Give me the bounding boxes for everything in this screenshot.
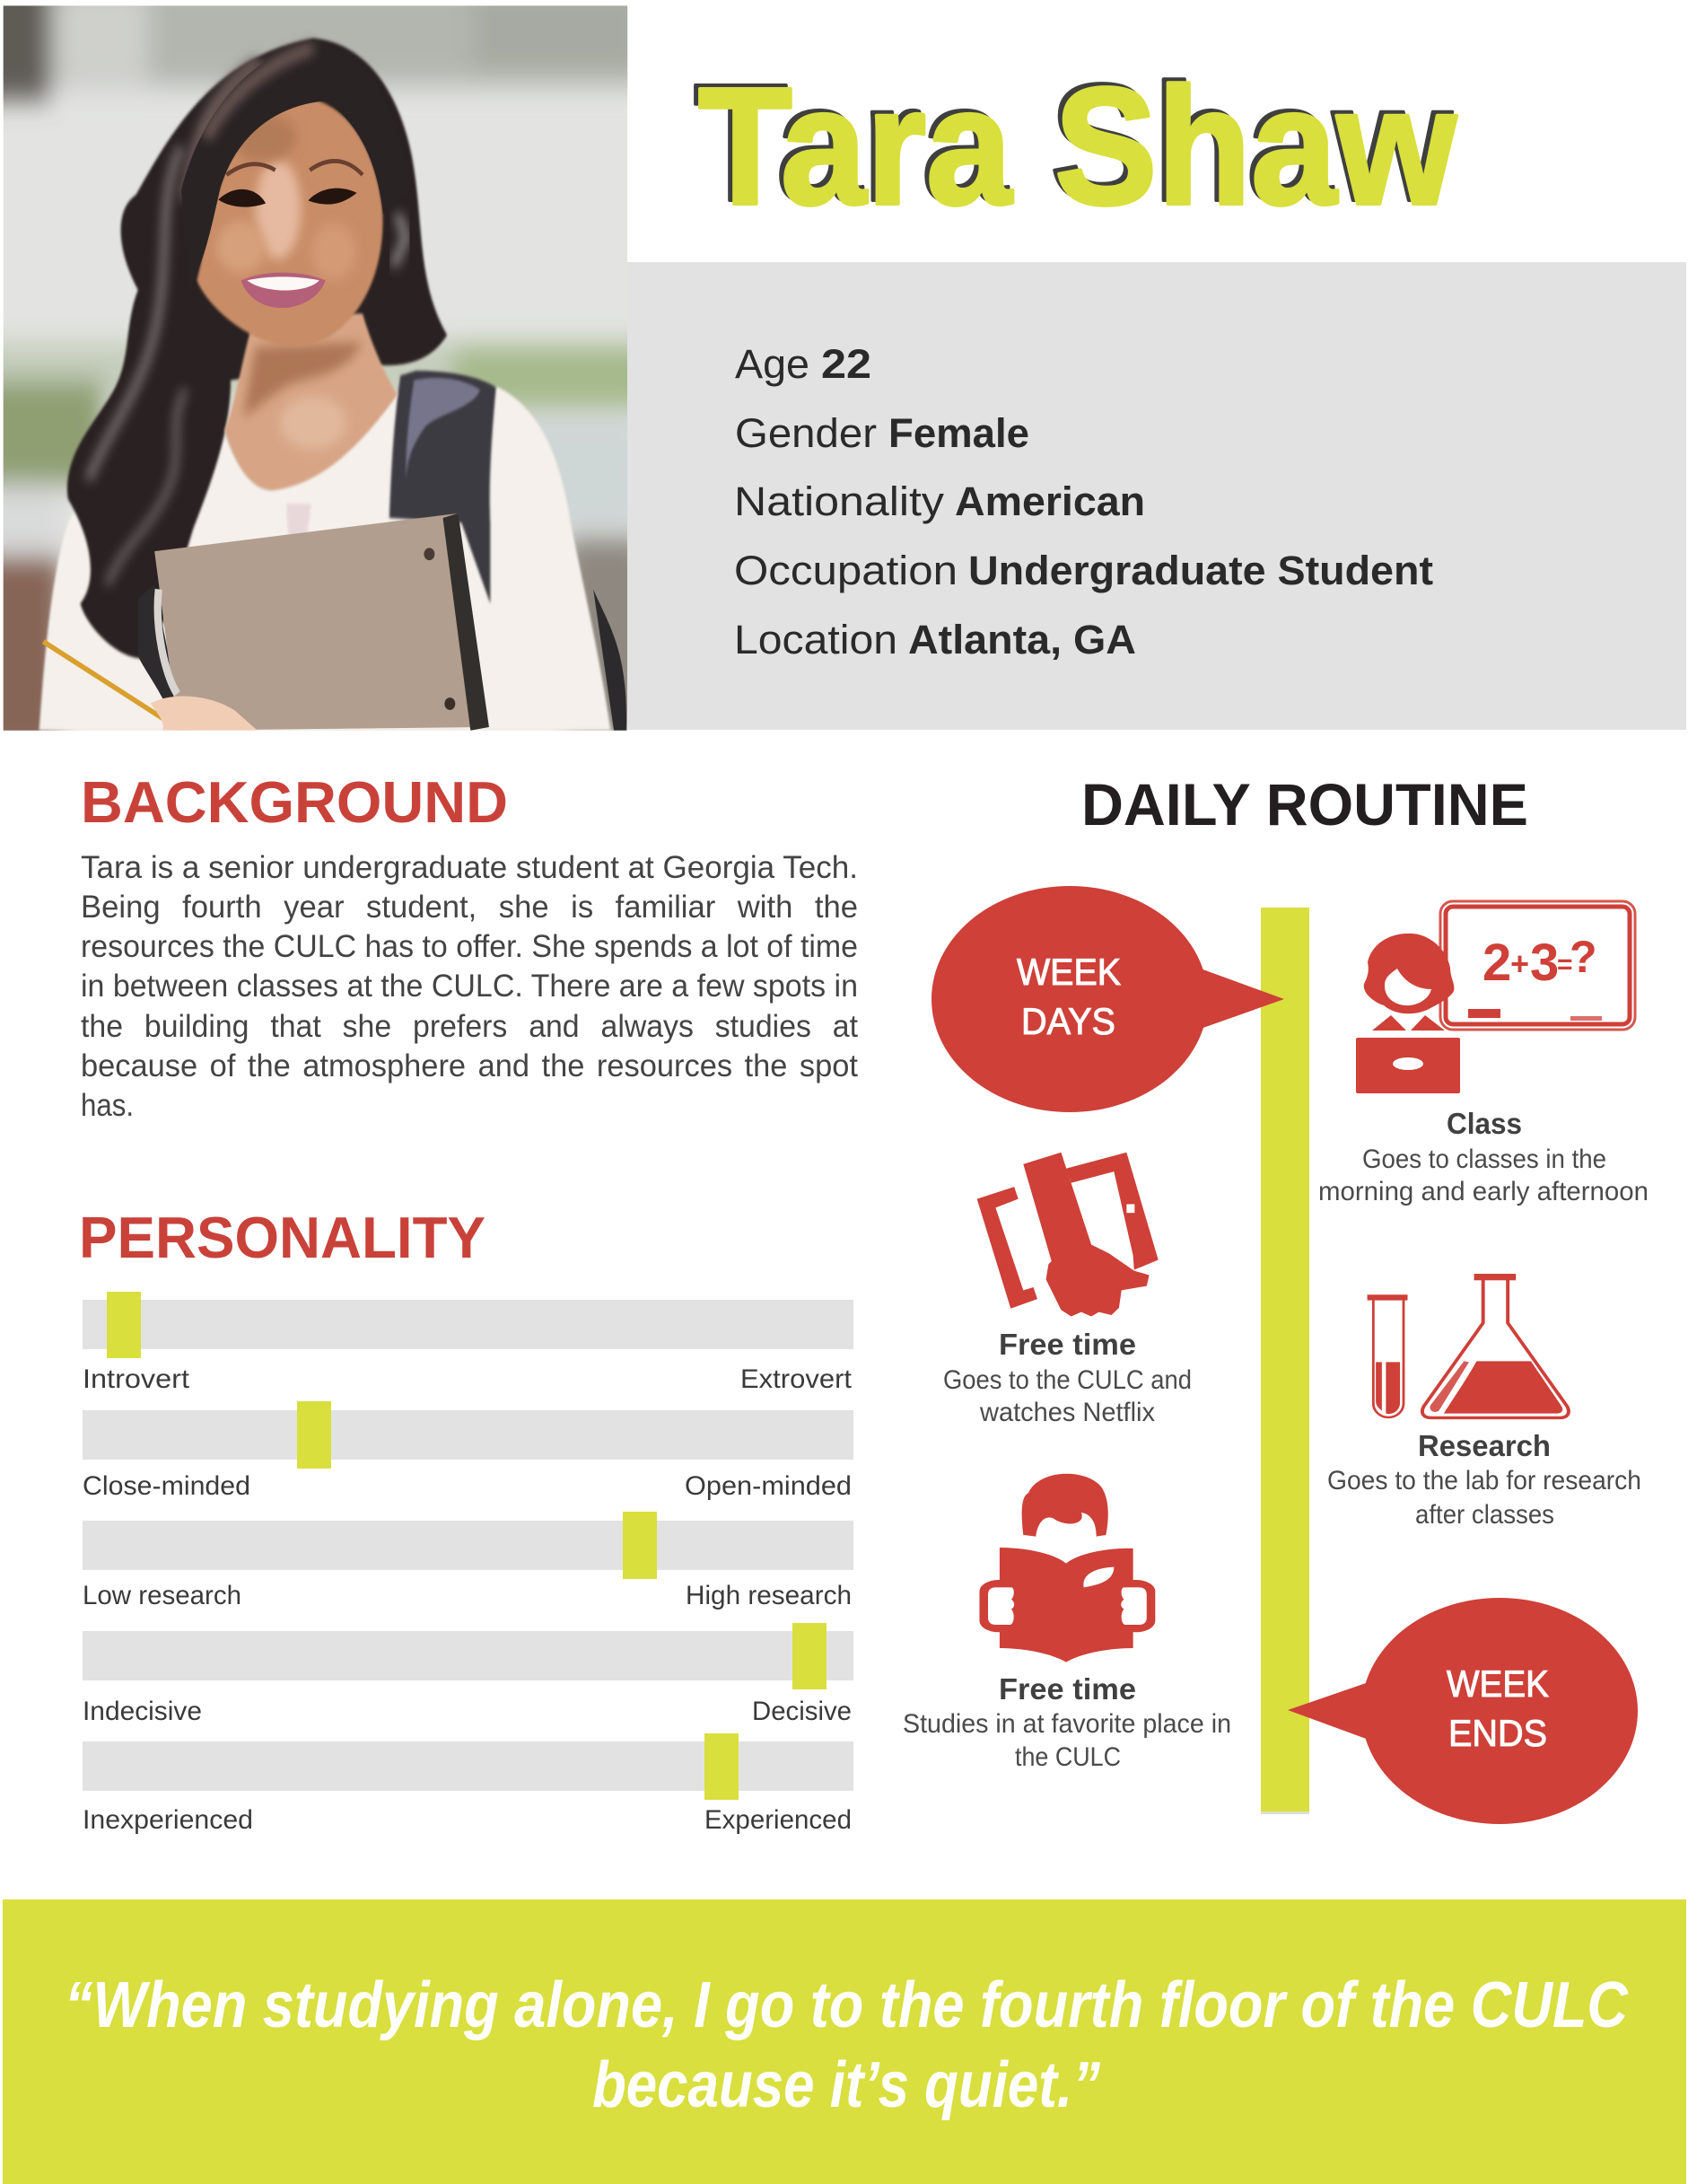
slider: introvert to extrovert: Introvert <box>83 1364 190 1394</box>
slider: close-minded to open-minded: Open-minded <box>685 1471 852 1501</box>
bubble: week ends: ENDS <box>1448 1712 1547 1754</box>
text: location: Location <box>734 617 897 662</box>
bubble: week ends: WEEK <box>1447 1662 1549 1705</box>
text: gender: Gender <box>735 410 877 456</box>
icon: person reading a book <box>979 1474 1155 1662</box>
text: location <box>734 617 1136 662</box>
sub: test tube <box>1368 1294 1407 1301</box>
text: gender <box>735 410 1029 456</box>
photo: portrait of Tara <box>0 0 660 756</box>
bubble: week ends <box>1288 1598 1638 1824</box>
icon: teacher at blackboard: + <box>1510 945 1529 982</box>
panel: demographics <box>627 262 1686 730</box>
text: nationality <box>734 478 1145 524</box>
text: background paragraph <box>81 850 858 1123</box>
sub: blackboard <box>1440 901 1635 1030</box>
text: location: Atlanta, GA <box>908 617 1136 662</box>
text: free time netflix: Free time <box>999 1328 1136 1361</box>
text: quote <box>65 1969 1629 2121</box>
sub: neck and chest <box>224 313 398 490</box>
text: occupation <box>734 548 1433 593</box>
heading: personality: PERSONALITY <box>79 1205 485 1270</box>
text: research: after classes <box>1415 1500 1554 1530</box>
sub: book <box>1000 1548 1133 1662</box>
icon: teacher at blackboard: 3 <box>1530 934 1559 992</box>
slider: inexperienced to experienced: Experienced <box>704 1805 852 1835</box>
sub: hair over forehead <box>181 63 384 271</box>
text: class: Goes to classes in the <box>1362 1145 1606 1174</box>
text: nationality: American <box>955 478 1145 524</box>
slider: indecisive to decisive <box>83 1623 853 1726</box>
slider: low research to high research: Low research <box>83 1581 241 1610</box>
timeline bar <box>1261 908 1309 1814</box>
bubble: week days: WEEK <box>1017 951 1121 993</box>
text: occupation: Undergraduate Student <box>968 548 1433 593</box>
icon: teacher at blackboard: 2 <box>1482 934 1511 992</box>
heading: background: BACKGROUND <box>81 769 508 835</box>
slider: low research to high research: High research <box>686 1581 852 1610</box>
sub: face <box>197 97 383 346</box>
bubble: week days <box>931 886 1284 1112</box>
text: gender: Female <box>888 410 1029 456</box>
text: occupation: Occupation <box>734 548 958 593</box>
text: free time studies: Free time <box>999 1672 1136 1706</box>
icon: teacher at blackboard: = <box>1557 950 1573 979</box>
sub: folder <box>154 513 488 731</box>
title: Tara Shaw: Tara Shaw <box>698 54 1457 240</box>
text: background paragraph: Being fourth year student, she is familiar with the <box>81 890 858 925</box>
sub: back hair <box>67 38 447 658</box>
text: research: Goes to the lab for research <box>1327 1466 1641 1495</box>
text: age <box>735 341 871 387</box>
sub: hands <box>979 1580 1025 1632</box>
slider: close-minded to open-minded <box>83 1401 853 1501</box>
panel: quote <box>3 1899 1686 2184</box>
text: class: Class <box>1447 1107 1522 1140</box>
slider: inexperienced to experienced: Inexperienced <box>83 1805 253 1835</box>
title: Tara Shaw: Tara Shaw <box>694 50 1453 236</box>
text: quote: because it’s quiet.” <box>592 2049 1100 2121</box>
text: free time netflix: Goes to the CULC and <box>943 1365 1192 1395</box>
text: background paragraph: has. <box>81 1088 134 1123</box>
sub: flask <box>1474 1274 1516 1280</box>
text: class: morning and early afternoon <box>1318 1177 1649 1206</box>
sub: teacher <box>1364 934 1454 1013</box>
sub: eyes and brows <box>218 189 266 207</box>
text: free time studies: the CULC <box>1015 1742 1121 1772</box>
slider: introvert to extrovert <box>83 1292 853 1394</box>
text: background paragraph: resources the CULC has to offer. She spends a lot of time <box>81 929 858 964</box>
text: background paragraph: the building that she prefers and always studies at <box>81 1009 858 1044</box>
sub: hand <box>151 697 258 731</box>
text: free time netflix: watches Netflix <box>979 1398 1155 1427</box>
sub: backpack straps <box>389 371 496 603</box>
icon: flask and test tube <box>1368 1274 1569 1417</box>
slider: indecisive to decisive: Decisive <box>752 1697 852 1726</box>
text: class <box>1318 1107 1649 1206</box>
slider: close-minded to open-minded: Close-minded <box>83 1471 250 1501</box>
text: free time studies: Studies in at favorite place in <box>903 1709 1231 1739</box>
slider: low research to high research <box>83 1512 853 1610</box>
heading: daily routine: DAILY ROUTINE <box>1081 771 1528 838</box>
text: age: Age <box>735 341 809 387</box>
chart: personality sliders <box>83 1292 853 1835</box>
sub: shirt <box>39 387 610 731</box>
sub: notebook spiral <box>158 589 177 694</box>
text: background paragraph: because of the atmosphere and the resources the spot <box>81 1048 858 1083</box>
icon: teacher at blackboard <box>1356 901 1635 1093</box>
icon: teacher at blackboard: ? <box>1570 932 1597 982</box>
sub: pencil <box>43 642 169 723</box>
sub: hair <box>1022 1474 1108 1537</box>
text: background paragraph: in between classes at the CULC. There are a few spots in <box>81 969 858 1004</box>
icon: hand holding tablet <box>977 1153 1159 1317</box>
slider: introvert to extrovert: Extrovert <box>740 1364 853 1394</box>
text: age: 22 <box>821 341 871 387</box>
sub: hand openings <box>988 1587 1014 1625</box>
text: research <box>1327 1429 1641 1530</box>
text: nationality: Nationality <box>734 478 945 524</box>
sub: smile <box>241 273 326 308</box>
sub: laptop <box>1356 1038 1460 1093</box>
slider: indecisive to decisive: Indecisive <box>83 1697 202 1726</box>
text: background paragraph: Tara is a senior undergraduate student at Georgia Tech. <box>81 850 858 885</box>
text: free time studies <box>903 1672 1231 1772</box>
bubble: week days: DAYS <box>1021 1000 1115 1042</box>
text: free time netflix <box>943 1328 1192 1427</box>
text: research: Research <box>1418 1429 1551 1462</box>
slider: inexperienced to experienced <box>83 1733 853 1835</box>
